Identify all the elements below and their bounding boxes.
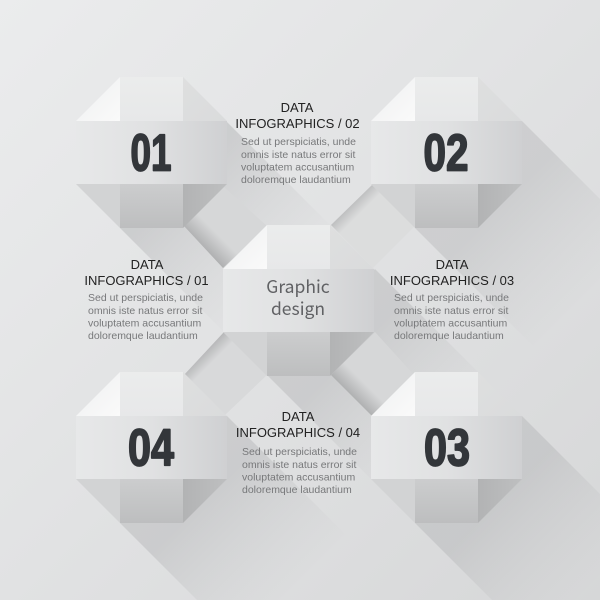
number 01: 01 [130, 124, 172, 182]
text block 03: voluptatem accusantium [394, 318, 507, 330]
octagon 04 [76, 372, 227, 523]
text block 01: voluptatem accusantium [88, 318, 201, 330]
text block 04: Sed ut perspiciatis, unde [242, 446, 357, 458]
text block 02: omnis iste natus error sit [241, 149, 355, 161]
number 04: 04 [128, 420, 174, 478]
text block 02: voluptatem accusantium [241, 162, 354, 174]
text block 02: INFOGRAPHICS / 02 [235, 116, 360, 131]
connector: 02 to center [331, 185, 415, 268]
octagon 01 [76, 77, 227, 228]
text block 01: doloremque laudantium [88, 330, 198, 342]
text block 03: omnis iste natus error sit [394, 305, 508, 317]
text block 02: doloremque laudantium [241, 174, 351, 186]
text block 01: Sed ut perspiciatis, unde [88, 292, 203, 304]
text block 03: Sed ut perspiciatis, unde [394, 292, 509, 304]
text block 04: omnis iste natus error sit [242, 459, 356, 471]
text block 04: doloremque laudantium [242, 484, 352, 496]
text block 01 [84, 257, 209, 342]
center octagon [223, 225, 374, 376]
octagon 02 [371, 77, 522, 228]
octagon 03 [371, 372, 522, 523]
text block 04: DATA [282, 409, 315, 424]
number 03: 03 [424, 420, 470, 478]
connector: 01 to center [184, 187, 267, 268]
text block 04: INFOGRAPHICS / 04 [236, 425, 360, 440]
text block 01: DATA [131, 257, 164, 272]
text block 04: voluptatem accusantium [242, 472, 355, 484]
center octagon: design [271, 296, 325, 321]
text block 03 [390, 257, 514, 342]
text block 03: INFOGRAPHICS / 03 [390, 273, 514, 288]
text block 02: DATA [281, 100, 314, 115]
center label: Graphic [266, 274, 330, 299]
connector: 04 to center [184, 332, 267, 416]
text block 01: omnis iste natus error sit [88, 305, 202, 317]
text block 04 [236, 409, 360, 496]
connector: 03 to center [331, 332, 414, 416]
long shadows [120, 121, 600, 600]
text block 01: INFOGRAPHICS / 01 [84, 273, 209, 288]
number 02: 02 [424, 124, 468, 182]
text block 03: DATA [436, 257, 469, 272]
text block 02: Sed ut perspiciatis, unde [241, 136, 356, 148]
text block 03: doloremque laudantium [394, 330, 504, 342]
text block 02 [235, 100, 360, 186]
